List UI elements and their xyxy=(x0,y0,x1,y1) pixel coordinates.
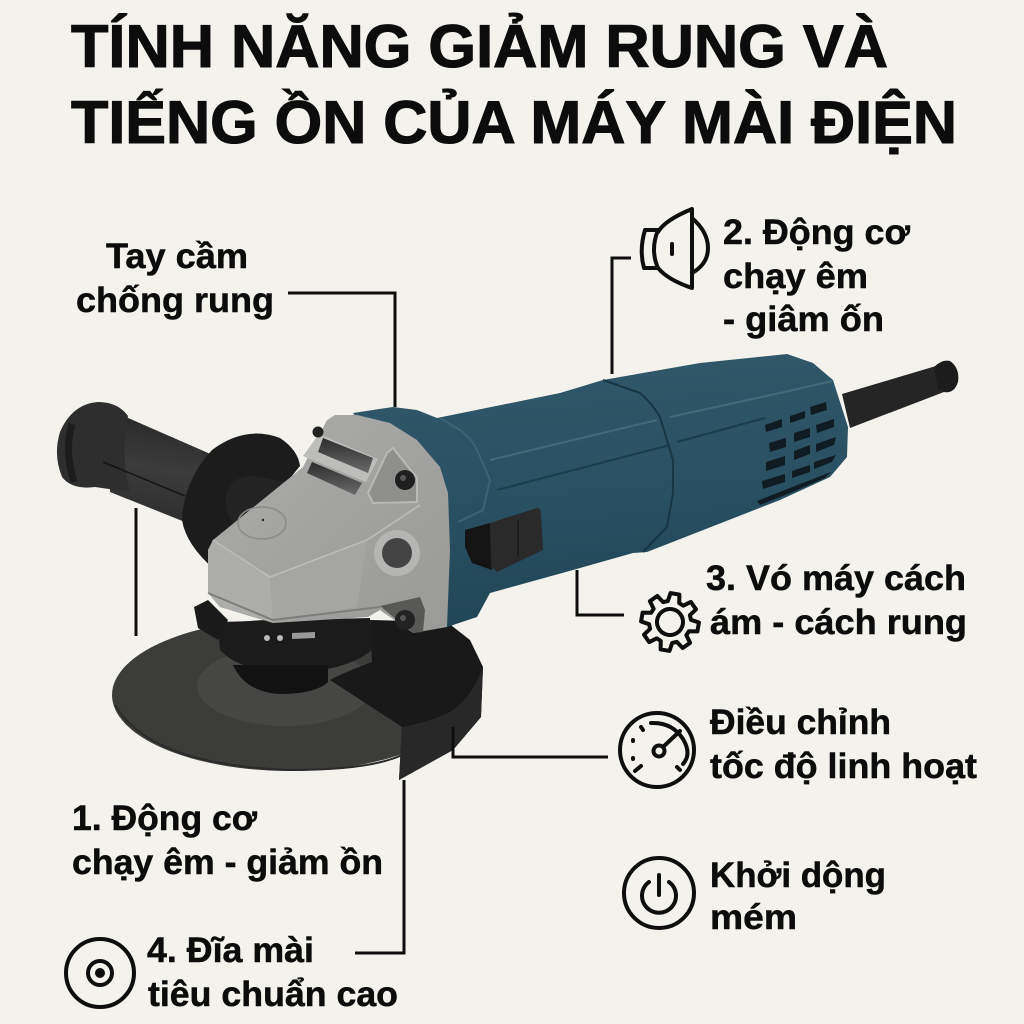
icon: power xyxy=(624,858,694,928)
illustration: angle grinder xyxy=(57,354,958,780)
icon: gear xyxy=(637,589,703,655)
vent slots xyxy=(757,402,836,505)
title: TIẾNG ỒN CỦA MÁY MÀI ĐIỆN xyxy=(71,89,957,156)
callout: 2. quiet motor: chạy êm xyxy=(723,257,868,296)
title: TÍNH NĂNG GIẢM RUNG VÀ xyxy=(71,13,888,80)
callout: 2. quiet motor: - giâm ốn xyxy=(723,300,884,339)
callout: anti-vibration handle: Tay cầm xyxy=(106,237,248,276)
callout: 1. quiet motor: 1. Động cơ xyxy=(72,799,257,838)
callout: 1. quiet motor xyxy=(72,508,383,882)
callout: 4. grinding disc: 4. Đĩa mài xyxy=(147,931,314,970)
callout: 2. quiet motor xyxy=(612,209,910,374)
callout: speed control: tốc độ linh hoạt xyxy=(710,747,977,786)
callout: 1. quiet motor: chạy êm - giảm ồn xyxy=(72,843,383,882)
icon: speaker xyxy=(642,209,708,288)
housing seam xyxy=(603,380,673,552)
body grooves xyxy=(490,381,832,460)
callout: soft start: mém xyxy=(710,898,797,937)
front face facets xyxy=(208,540,273,622)
power cord xyxy=(842,361,958,428)
callout: 4. grinding disc xyxy=(66,780,404,1014)
inset panel and screws xyxy=(368,448,417,503)
slide switch xyxy=(465,508,543,572)
cutting disc xyxy=(112,619,468,771)
threaded side port xyxy=(374,530,420,576)
collar and flange xyxy=(194,600,372,694)
callout: anti-vibration handle xyxy=(76,237,395,407)
front collar shading xyxy=(440,418,490,522)
callout: 3. insulated housing: ám - cách rung xyxy=(710,603,967,642)
callout: soft start xyxy=(624,856,886,937)
motor housing xyxy=(353,354,848,627)
disc guard xyxy=(330,620,483,780)
callout: 3. insulated housing: 3. Vó máy cách xyxy=(706,559,966,598)
icon: gauge xyxy=(620,713,694,787)
callout: 3. insulated housing xyxy=(577,559,967,655)
callout: speed control xyxy=(453,703,977,787)
cooling slots xyxy=(303,434,378,482)
callout: speed control: Điều chỉnh xyxy=(710,703,891,742)
callout: 2. quiet motor: 2. Động cơ xyxy=(723,213,910,252)
title xyxy=(71,13,957,156)
callout: anti-vibration handle: chống rung xyxy=(76,281,274,320)
callout: 4. grinding disc: tiêu chuẩn cao xyxy=(148,975,398,1014)
gear head xyxy=(208,415,450,633)
icon: disc xyxy=(66,939,134,1007)
round badge xyxy=(238,507,286,539)
callout: soft start: Khởi dộng xyxy=(710,856,886,895)
side handle xyxy=(57,402,300,570)
recess with lower screw xyxy=(380,597,425,633)
